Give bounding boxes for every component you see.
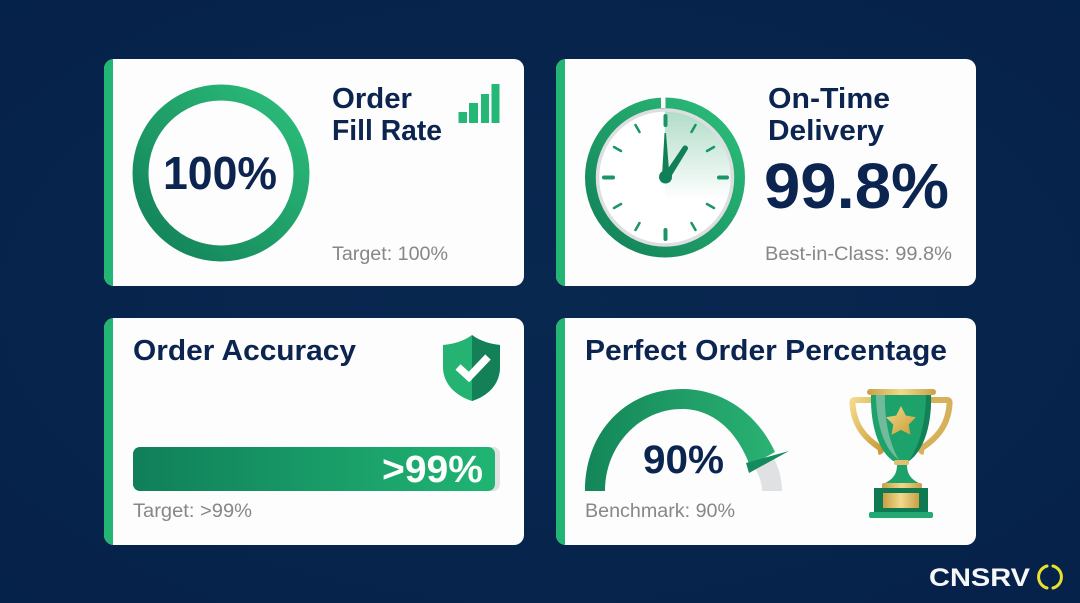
icon: clock <box>590 96 740 252</box>
panel: order fill rate <box>104 59 524 286</box>
value: 100%: 100% <box>163 147 277 199</box>
heading: order fill rate: Order <box>332 83 412 115</box>
panel: on-time delivery <box>556 59 976 286</box>
logo: CNSRV: CNSRV <box>929 564 1030 592</box>
panel: perfect order percentage <box>556 318 976 545</box>
heading: order fill rate: Fill Rate <box>332 115 442 147</box>
icon: shield check <box>443 335 500 401</box>
panel: order accuracy <box>104 318 524 545</box>
value: 99.8%: 99.8% <box>764 150 949 222</box>
value: >99%: >99% <box>382 449 483 491</box>
target label: Target: >99% <box>133 501 252 522</box>
icon: logo ring <box>1039 566 1061 588</box>
heading: perfect order percentage: Perfect Order Percentage <box>585 335 947 367</box>
heading: on-time delivery: On-Time <box>768 83 890 115</box>
target label: Target: 100% <box>332 244 448 265</box>
progress bar <box>133 447 500 491</box>
gauge chart <box>585 389 789 491</box>
icon: trophy <box>852 389 950 518</box>
heading: order accuracy: Order Accuracy <box>133 335 356 367</box>
heading: on-time delivery: Delivery <box>768 115 884 147</box>
icon: signal bars <box>458 84 500 123</box>
logo: CNSRV <box>929 564 1061 592</box>
best-in-class label: Best-in-Class: 99.8% <box>765 244 952 265</box>
progress ring: 100% <box>140 92 302 254</box>
value: 90%: 90% <box>643 438 724 482</box>
benchmark label: Benchmark: 90% <box>585 501 735 522</box>
